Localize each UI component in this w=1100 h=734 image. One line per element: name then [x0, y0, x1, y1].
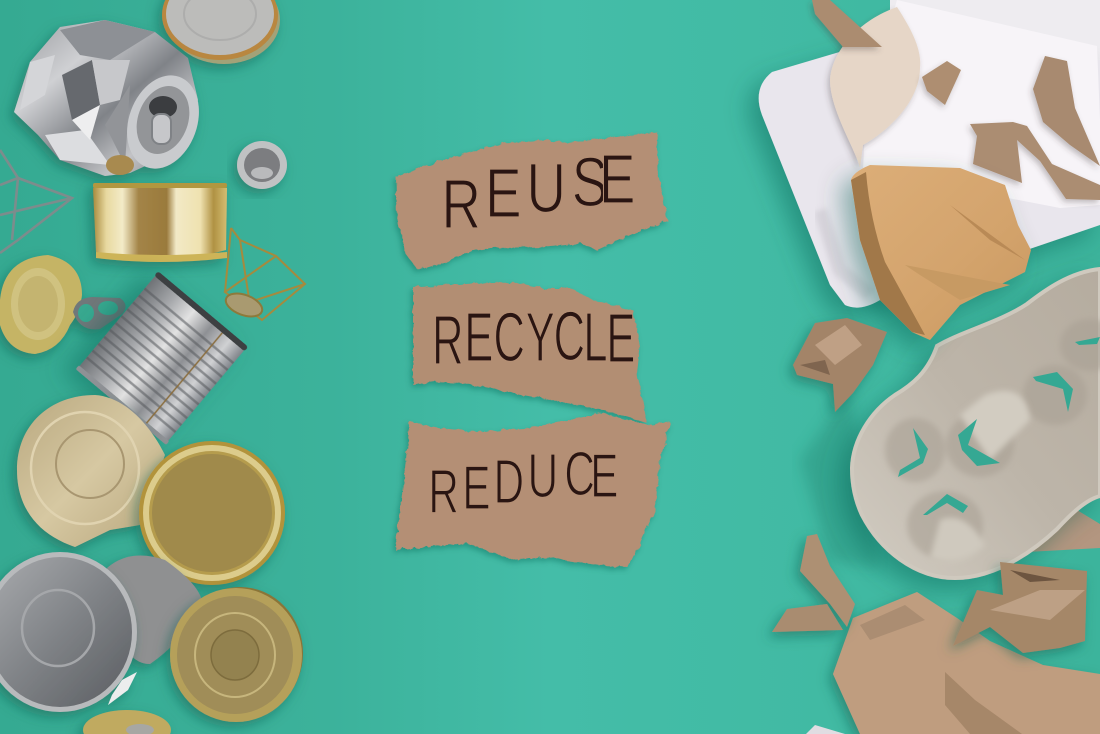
- cup recesses: [885, 319, 1100, 559]
- torn paper: reduce: [395, 413, 670, 567]
- torn kraft strip, right: [1033, 56, 1100, 166]
- crumpled kraft ball: [793, 318, 887, 412]
- gold wire muzzle: [223, 228, 305, 321]
- silver lid with torn edge: [0, 552, 137, 712]
- twisted wire muzzle, grey: [0, 150, 72, 253]
- large white paper plate: [759, 40, 1100, 308]
- small kraft scrap: [922, 61, 961, 105]
- handwritten word: REUSE: REUSE: [441, 141, 635, 244]
- gold pull-tab lid: [0, 255, 126, 354]
- torn paper: recycle: [413, 282, 647, 423]
- gold tin can: [93, 183, 227, 262]
- gold lid cut off at bottom: [83, 710, 171, 734]
- beige plate piece: [830, 7, 920, 168]
- kraft folded scrap, centre: [970, 122, 1100, 200]
- white rectangular sheet: [863, 0, 1100, 208]
- handwritten word: RECYCLE: RECYCLE: [432, 297, 635, 380]
- pull tab: [73, 297, 126, 329]
- moulded pulp cup carrier: [852, 269, 1100, 578]
- corrugated tin can: [76, 271, 248, 445]
- grey dull lid: [107, 556, 202, 664]
- large kraft paper sheet: [833, 592, 1100, 734]
- handwritten word: REDUCE: REDUCE: [428, 440, 618, 527]
- open can top: [162, 0, 280, 64]
- white paper plates, top right: [759, 0, 1100, 308]
- torn paper: reuse: [396, 132, 667, 270]
- large pale gold lid: [17, 395, 165, 547]
- crushed aluminium can: [14, 20, 211, 179]
- crumpled kraft twist: [953, 562, 1087, 653]
- white plate scrap at bottom: [806, 725, 845, 734]
- torn kraft scrap, top: [812, 0, 882, 47]
- carrier holes: [898, 337, 1100, 515]
- small silver cap: [237, 141, 287, 189]
- gold ribbed lid: [170, 587, 303, 722]
- gold lid: [139, 441, 285, 585]
- crumpled kraft paper cup: [851, 165, 1031, 340]
- torn kraft triangle pieces: [772, 534, 855, 632]
- crumpled kraft strip on sheet: [945, 672, 1022, 734]
- soft shadow cast left of carrier: [800, 390, 880, 570]
- torn kraft strip behind tray: [1027, 510, 1100, 552]
